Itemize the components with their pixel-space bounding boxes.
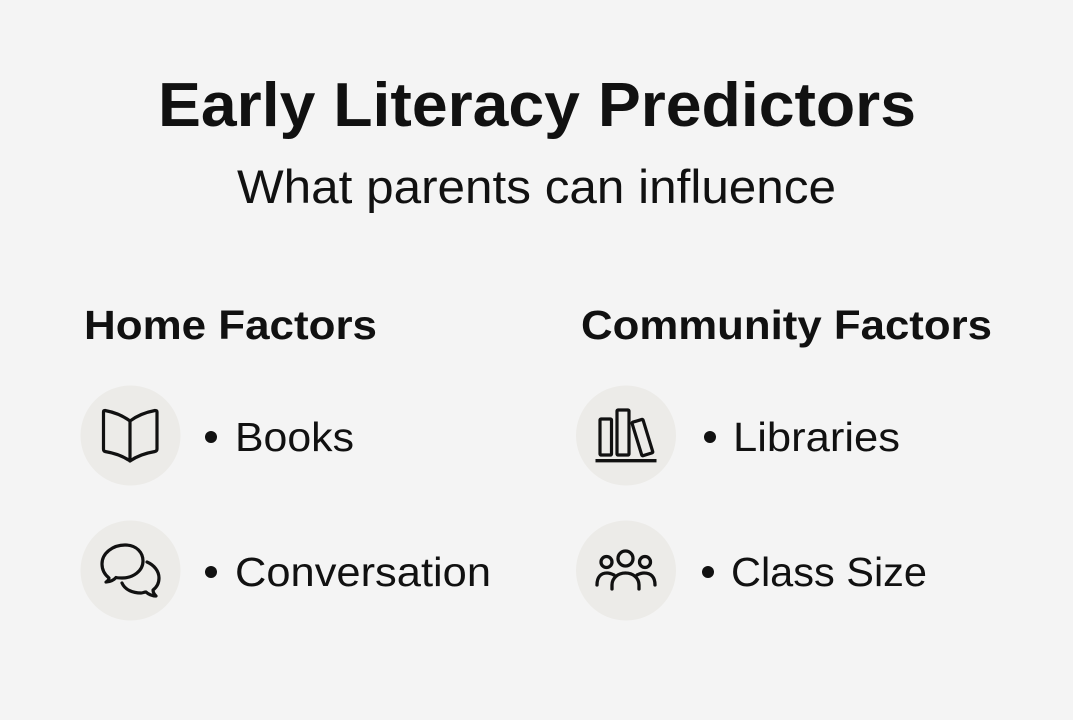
bullet: books — [205, 431, 217, 443]
label: conversation: Conversation — [235, 549, 491, 595]
bullet: class size — [702, 566, 714, 578]
label: books: Books — [235, 414, 354, 460]
label: libraries: Libraries — [733, 414, 900, 460]
bullet: libraries — [704, 431, 716, 443]
icon: group of people — [576, 520, 676, 620]
icon: speech bubbles — [80, 520, 180, 620]
label: class size: Class Size — [731, 549, 927, 595]
item: books — [80, 386, 354, 486]
subtitle: What parents can influence — [237, 160, 836, 213]
item: libraries — [576, 386, 900, 486]
icon: books on shelf — [576, 386, 676, 486]
item: conversation — [80, 520, 491, 620]
panel: community factors — [576, 302, 992, 620]
item: class size — [576, 520, 927, 620]
heading: home factors: Home Factors — [84, 302, 377, 348]
title: Early Literacy Predictors — [158, 71, 916, 140]
icon: open book — [80, 386, 180, 486]
heading: community factors: Community Factors — [581, 302, 992, 348]
panel: home factors — [80, 302, 491, 620]
bullet: conversation — [205, 566, 217, 578]
